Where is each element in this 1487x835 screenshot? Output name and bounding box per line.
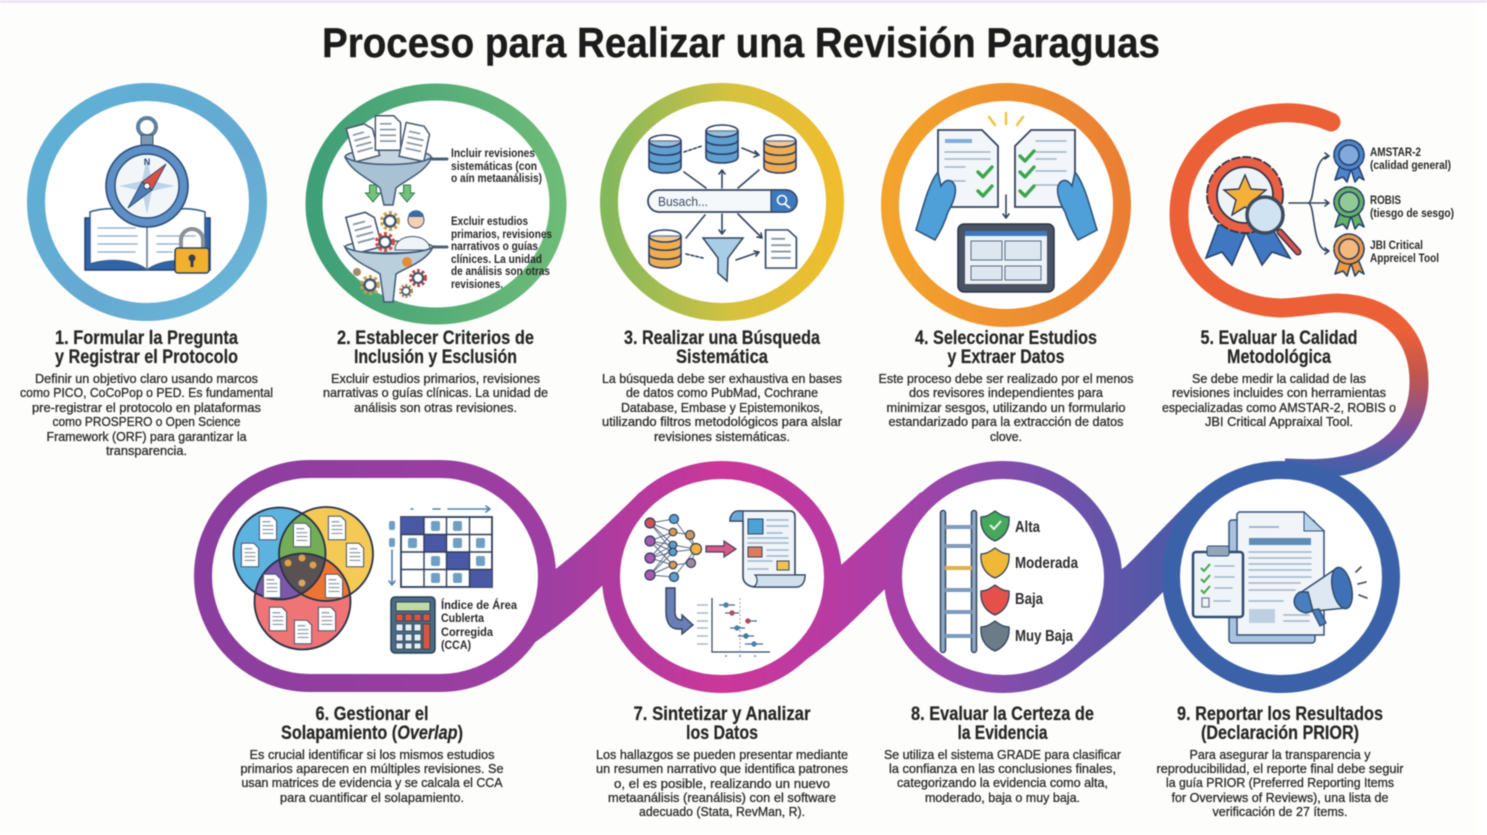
icon: badge with magnifier — [1206, 157, 1298, 265]
text 9: reproducibilidad, el reporte final debe seguir — [1156, 761, 1404, 776]
text 5: especializadas como AMSTAR-2, ROBIS o — [1162, 400, 1396, 415]
CCA label: (CCA) — [441, 638, 471, 652]
ring 7 — [611, 470, 833, 684]
heading 7: los Datos — [686, 722, 758, 744]
icon: calculator — [391, 597, 435, 653]
CCA label — [441, 597, 517, 652]
text 7: un resumen narrativo que identifica patrones — [596, 761, 848, 776]
icon label: exclude: de análisis son otras — [451, 264, 550, 278]
text 7: metaanálisis (reanálisis) con el software — [608, 790, 836, 805]
text 4: dos revisores independientes para — [909, 385, 1104, 400]
heading 9 — [1177, 703, 1383, 744]
icon: databases and search bar — [648, 125, 797, 281]
heading 5: 5. Evaluar la Calidad — [1200, 327, 1358, 349]
ring 1 — [36, 92, 258, 312]
heading 2: 2. Establecer Criterios de — [337, 327, 534, 349]
chart: evidence matrix — [389, 506, 492, 587]
text 1: Definir un objetivo claro usando marcos — [35, 371, 258, 386]
icon label: exclude: Excluir estudios — [451, 214, 528, 228]
text 3: La búsqueda debe ser exhaustiva en bases — [602, 371, 842, 386]
heading 3 — [624, 327, 820, 368]
icon label: include: sistemáticas (con — [451, 159, 537, 173]
text 6: usan matrices de evidencia y se calcala el CCA — [242, 775, 503, 790]
icon: shield Baja — [981, 585, 1009, 615]
CCA label: Índice de Área — [441, 597, 517, 612]
search placeholder: Busach... — [658, 194, 708, 209]
tool labels: JBI Critical — [1370, 238, 1423, 252]
heading 8: 8. Evaluar la Certeza de — [911, 703, 1094, 725]
icon: JBI badge — [1334, 234, 1364, 276]
text 2 — [323, 371, 548, 415]
tool labels: ROBIS — [1370, 193, 1401, 207]
heading 2 — [337, 327, 534, 368]
text 1 — [20, 371, 273, 458]
text 6: para cuantificar el solapamiento. — [280, 790, 464, 805]
icon: shield Alta — [981, 511, 1009, 541]
text 7 — [596, 747, 848, 819]
ring 2 — [314, 92, 558, 316]
text 8 — [884, 747, 1122, 805]
panel: step 5 — [1162, 113, 1454, 469]
text 2: análisis son otras revisiones. — [354, 400, 517, 415]
text 4 — [878, 371, 1134, 444]
heading 8 — [911, 703, 1094, 744]
tool labels: (tiesgo de sesgo) — [1370, 206, 1454, 220]
heading 3: Sistemática — [676, 346, 768, 368]
icon label: exclude: narrativos o guías — [451, 239, 538, 253]
certainty labels: Muy Baja — [1015, 628, 1073, 645]
text 3: Database, Embase y Epistemonikos, — [621, 400, 823, 415]
text 8: categorizando la evidencia como alta, — [897, 775, 1108, 790]
panel: step 2 — [314, 92, 558, 415]
text 9 — [1156, 747, 1404, 819]
text 3: revisiones sistemáticas. — [654, 429, 790, 444]
panel: step 3 — [602, 92, 843, 444]
heading 1: 1. Formular la Pregunta — [55, 327, 238, 349]
certainty labels: Alta — [1015, 519, 1040, 536]
text 3: de datos como PubMad, Cochrane — [626, 385, 818, 400]
curved path from step 5 into step 9 — [1179, 113, 1419, 469]
text 5: Se debe medir la calidad de las — [1192, 371, 1366, 386]
heading 4: y Extraer Datos — [948, 346, 1065, 368]
heading 3: 3. Realizar una Búsqueda — [624, 327, 820, 349]
icon: evidence ladder — [943, 513, 974, 650]
CCA label: Corregida — [441, 625, 493, 639]
heading 4 — [915, 327, 1097, 368]
text 4: Este proceso debe ser realizado por el menos — [878, 371, 1134, 386]
tool labels — [1370, 145, 1454, 265]
branching arrows — [1289, 153, 1329, 254]
icon label: exclude: primarios, revisiones — [451, 227, 552, 241]
icon: shield Muy Baja — [981, 621, 1009, 651]
panel: step 7 — [596, 470, 848, 819]
text 8: Se utiliza el sistema GRADE para clasificar — [884, 747, 1122, 762]
text 2: narrativas o guías clínicas. La unidad de — [323, 385, 548, 400]
heading 9: 9. Reportar los Resultados — [1177, 703, 1383, 725]
certainty labels — [1015, 519, 1078, 645]
icon: report, checklist and megaphone — [1193, 512, 1367, 643]
icon: ROBIS badge — [1334, 187, 1364, 229]
text 6: Es crucial identificar si los mismos estudios — [250, 747, 495, 762]
panel: step 9 — [1156, 470, 1404, 819]
text 2: Excluir estudios primarios, revisiones — [331, 371, 540, 386]
text 5 — [1162, 371, 1396, 429]
heading 5 — [1200, 327, 1358, 368]
certainty labels: Moderada — [1015, 555, 1078, 572]
heading 6: Solapamiento (Overlap) — [281, 722, 463, 744]
text 7: adecuado (Stata, RevMan, R). — [639, 804, 805, 819]
heading 6: 6. Gestionar el — [316, 703, 428, 725]
text 8: la confianza en las conclusiones finales, — [889, 761, 1116, 776]
text 9: la guía PRIOR (Preferred Reporting Items — [1166, 775, 1394, 790]
heading 6 — [281, 703, 463, 744]
text 8: moderado, baja o muy baja. — [925, 790, 1080, 805]
panel: step 8 — [884, 470, 1122, 805]
text 5: revisiones incluides con herramientas — [1172, 385, 1386, 400]
panel: step 1 — [20, 92, 273, 458]
icon label: exclude: revisiones. — [451, 277, 503, 291]
text 4: estandarizado para la extracción de datos — [888, 414, 1124, 429]
text 6 — [240, 747, 504, 805]
text 1: pre-registrar el protocolo en plataformas — [32, 400, 261, 415]
heading 7 — [634, 703, 811, 744]
ring 6 — [203, 469, 547, 683]
icon label: include: o aín metaanálisis) — [451, 171, 542, 185]
tool labels: (calidad general) — [1370, 158, 1451, 172]
heading 5: Metodológica — [1227, 346, 1331, 368]
text 9: Para asegurar la transparencia y — [1190, 747, 1371, 762]
icon: book, compass and padlock — [85, 118, 210, 273]
text 1: Framework (ORF) para garantizar la — [46, 429, 247, 444]
tool labels: AMSTAR-2 — [1370, 145, 1421, 159]
icon label: exclude — [451, 214, 552, 291]
heading 1: y Registrar el Protocolo — [55, 346, 238, 368]
ring 4 — [890, 92, 1122, 318]
text 3 — [602, 371, 843, 444]
text 4: clove. — [990, 429, 1022, 444]
text 1: como PROSPERO o Open Science — [52, 414, 240, 429]
text 9: verificación de 27 ítems. — [1212, 804, 1348, 819]
flow connectors between bottom circles — [500, 492, 1215, 662]
heading 9: (Declaración PRIOR) — [1201, 722, 1359, 744]
icon: shield Moderada — [981, 548, 1009, 578]
title: Proceso para Realizar una Revisión Paraguas — [322, 19, 1160, 66]
icon: funnels filtering documents — [345, 116, 447, 302]
heading 8: la Evidencia — [958, 722, 1048, 744]
text 9: for Overviews of Reviews), una lista de — [1172, 790, 1388, 805]
ring 8 — [893, 470, 1113, 684]
icon: neural network, report and forest plot — [645, 511, 805, 656]
heading 7: 7. Sintetizar y Analizar — [634, 703, 811, 725]
panel: step 6 — [203, 469, 547, 805]
certainty labels: Baja — [1015, 591, 1043, 608]
panel: step 4 — [878, 92, 1134, 444]
text 1: transparencia. — [106, 443, 187, 458]
heading 2: Inclusión y Esclusión — [354, 346, 517, 368]
text 3: utilizando filtros metodológicos para alslar — [602, 414, 843, 429]
heading 1 — [55, 327, 238, 368]
ring 3 — [609, 92, 835, 312]
icon: venn diagram — [234, 507, 373, 650]
icon: AMSTAR-2 badge — [1334, 140, 1364, 182]
compass north mark: N — [144, 157, 150, 167]
ring 9 — [1171, 470, 1391, 684]
icon label: include: Incluir revisiones — [451, 146, 535, 160]
text 5: JBI Critical Appraixal Tool. — [1205, 414, 1353, 429]
icon: reviewers with documents and tablet — [916, 113, 1097, 292]
text 1: como PICO, CoCoPop o PED. Es fundamental — [20, 385, 273, 400]
text 7: Los hallazgos se pueden presentar mediante — [596, 747, 848, 762]
heading 4: 4. Seleccionar Estudios — [915, 327, 1097, 349]
CCA label: Cublerta — [441, 611, 484, 625]
text 6: primarios aparecen en múltiples revisiones. Se — [240, 761, 504, 776]
text 7: o, el es posible, realizando un nuevo — [614, 776, 830, 791]
icon label: exclude: clínices. La unidad — [451, 252, 542, 266]
icon label: include — [451, 146, 542, 185]
tool labels: Appreicel Tool — [1370, 251, 1439, 265]
text 4: minimizar sesgos, utilizando un formulario — [886, 400, 1126, 415]
